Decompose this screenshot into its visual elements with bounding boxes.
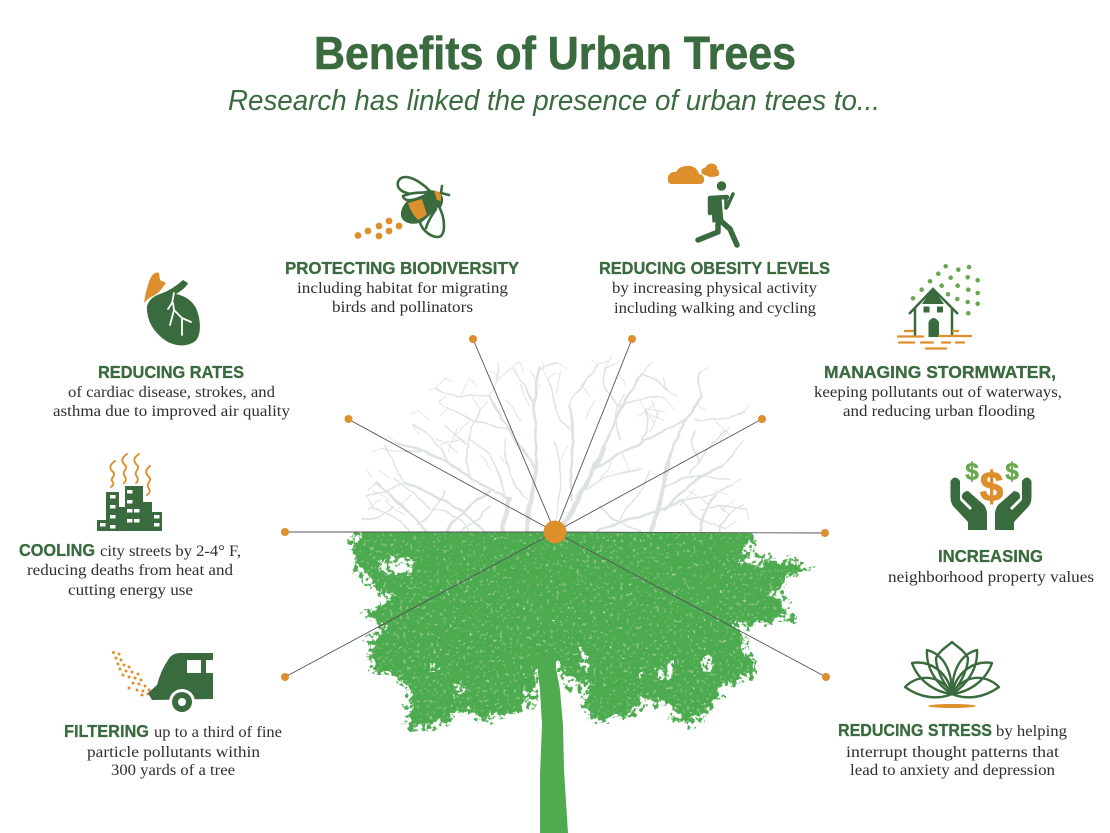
panel: managing stormwater (814, 264, 1062, 420)
panel: filtering (64, 651, 282, 779)
description: by increasing physical activity (612, 280, 817, 297)
connector dots (281, 335, 830, 681)
icon: hot city (97, 454, 162, 531)
heading: MANAGING STORMWATER, (824, 362, 1056, 382)
panel: increasing property values (888, 458, 1094, 586)
description: and reducing urban flooding (843, 403, 1035, 420)
heading: REDUCING RATES (98, 362, 244, 382)
subtitle: Research has linked the presence of urban trees to... (228, 85, 880, 117)
description: birds and pollinators (332, 299, 473, 316)
description: lead to anxiety and depression (850, 762, 1055, 779)
icon: lotus (905, 642, 999, 708)
panel: reducing obesity (599, 164, 830, 317)
description (846, 723, 1067, 779)
icon: hands holding dollars: $ (1005, 458, 1019, 486)
description: asthma due to improved air quality (53, 403, 290, 420)
description: neighborhood property values (888, 569, 1094, 586)
heading: PROTECTING BIODIVERSITY (285, 258, 519, 278)
connector lines (285, 339, 826, 677)
description (27, 543, 241, 599)
description: 300 yards of a tree (111, 762, 235, 779)
panel: cooling (19, 454, 241, 599)
description (87, 724, 282, 779)
description: up to a third of fine (154, 724, 282, 741)
icon: hands holding dollars: $ (980, 463, 1003, 510)
canopy foliage (356, 520, 800, 728)
panel: reducing rates (53, 272, 290, 420)
heading: FILTERING (64, 721, 149, 741)
heading: REDUCING STRESS (838, 720, 992, 740)
icon: house in rain (898, 264, 980, 348)
description: interrupt thought patterns that (846, 744, 1060, 761)
description: cutting energy use (68, 582, 193, 599)
panel: reducing stress (838, 642, 1067, 779)
description: by helping (996, 723, 1067, 740)
description: city streets by 2-4° F, (100, 543, 241, 560)
icon: hands holding dollars: $ (965, 458, 979, 486)
icon: heart (144, 272, 200, 345)
description (297, 280, 508, 316)
heading: COOLING (19, 540, 95, 560)
panel: protecting biodiversity (285, 177, 519, 316)
description (612, 280, 817, 317)
heading: REDUCING OBESITY LEVELS (599, 258, 830, 278)
trunk (536, 655, 568, 833)
icon: truck with exhaust (112, 651, 213, 715)
description: particle pollutants within (87, 744, 260, 761)
description: including walking and cycling (614, 300, 816, 317)
description: of cardiac disease, strokes, and (68, 384, 275, 401)
title: Benefits of Urban Trees (314, 27, 796, 79)
tree: bare branches upper half (362, 358, 750, 536)
icon: bee (355, 177, 449, 239)
description (814, 384, 1062, 420)
description: including habitat for migrating (297, 280, 508, 297)
description: keeping pollutants out of waterways, (814, 384, 1062, 401)
icon: hands holding dollars (950, 458, 1032, 530)
canopy pale texture (356, 520, 800, 728)
description: reducing deaths from heat and (27, 562, 233, 579)
canopy ragged fringe (356, 520, 800, 728)
heading: INCREASING (938, 546, 1043, 566)
icon: runner under clouds (668, 164, 737, 245)
tree: leafy canopy lower half and trunk (356, 520, 800, 833)
description (53, 384, 290, 420)
